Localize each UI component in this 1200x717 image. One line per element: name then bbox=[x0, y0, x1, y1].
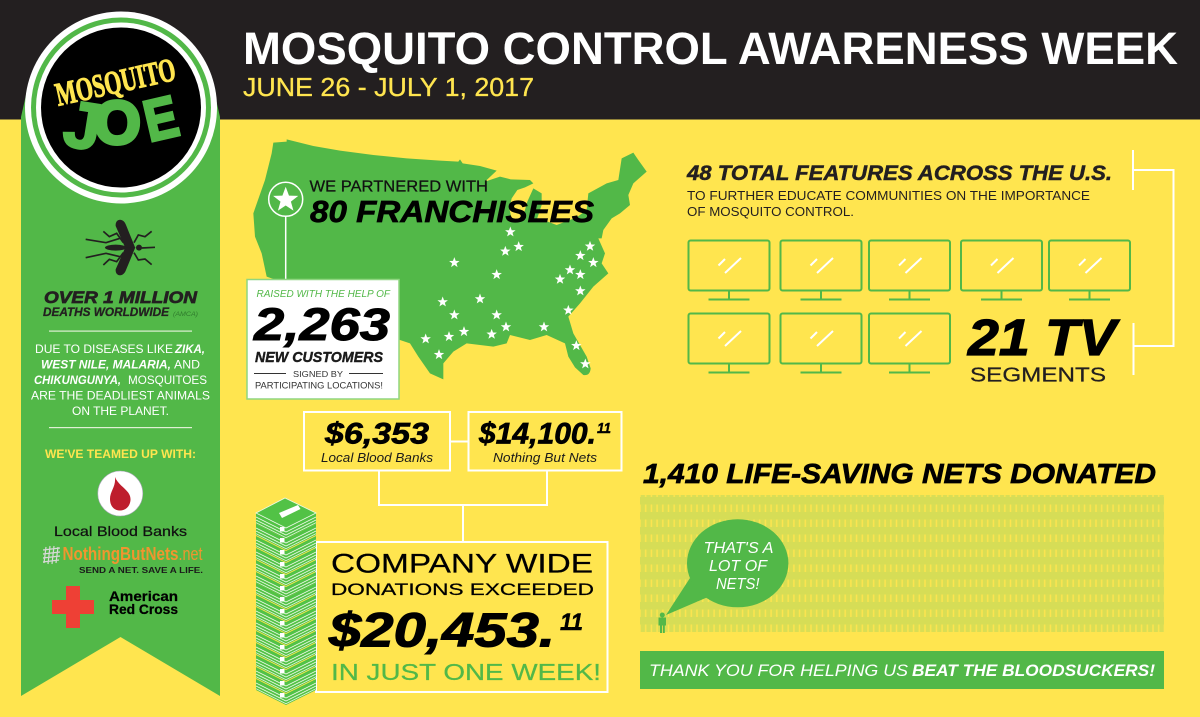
box: local blood banks bbox=[304, 412, 450, 470]
callout: new customers: PARTICIPATING LOCATIONS! bbox=[255, 380, 383, 392]
icon: blood drop bbox=[98, 471, 143, 516]
disease text: CHIKUNGUNYA, bbox=[34, 373, 121, 387]
description: TO FURTHER EDUCATE COMMUNITIES ON THE IMPORTANCE bbox=[687, 189, 1090, 203]
banner: thank you: BEAT THE BLOODSUCKERS! bbox=[912, 661, 1155, 680]
banner: thank you: THANK YOU FOR HELPING US bbox=[649, 661, 909, 680]
callout: new customers bbox=[247, 280, 399, 399]
disease text bbox=[31, 342, 210, 418]
box: company wide total bbox=[316, 542, 608, 692]
logo: american red cross: Red Cross bbox=[109, 601, 178, 617]
label: local blood banks: Local Blood Banks bbox=[54, 523, 187, 539]
disease text: WEST NILE, MALARIA, bbox=[41, 358, 171, 372]
logo badge: E bbox=[138, 84, 184, 154]
box: company wide total: DONATIONS EXCEEDED bbox=[331, 580, 594, 599]
logo badge: J bbox=[59, 86, 107, 165]
title: MOSQUITO CONTROL AWARENESS WEEK bbox=[243, 23, 1178, 74]
box: company wide total: 11 bbox=[560, 609, 583, 636]
callout: new customers: 2,263 bbox=[253, 299, 390, 350]
logo: nothing but nets: SEND A NET. SAVE A LIFE. bbox=[79, 565, 203, 575]
icons: tv grid bbox=[688, 240, 1130, 372]
heading: we partnered with: WE PARTNERED WITH bbox=[310, 178, 488, 196]
speech bubble: LOT OF bbox=[709, 558, 768, 575]
map of the U.S. with stars bbox=[253, 139, 647, 379]
heading: 48 total features: 48 TOTAL FEATURES ACROSS THE U.S. bbox=[686, 162, 1112, 185]
icon: mosquito bbox=[86, 220, 155, 275]
logo badge: O bbox=[94, 90, 141, 156]
stat: 21 tv: 21 TV bbox=[967, 309, 1120, 366]
callout: new customers: SIGNED BY bbox=[293, 369, 343, 379]
speech bubble: THAT'S A bbox=[704, 540, 774, 557]
disease text: ZIKA, bbox=[174, 342, 205, 356]
icon: star marker bbox=[269, 182, 303, 279]
ribbon shape bbox=[21, 60, 220, 696]
logo: american red cross bbox=[52, 586, 178, 628]
panel: franchisee map bbox=[247, 139, 647, 399]
banner: thank you bbox=[640, 651, 1164, 689]
icon: person bbox=[658, 612, 666, 633]
box: nothing but nets: $14,100. bbox=[478, 418, 596, 450]
teamed up heading: WE'VE TEAMED UP WITH: bbox=[45, 449, 196, 461]
panel: donation breakdown bbox=[256, 412, 622, 705]
box: nothing but nets: 11 bbox=[597, 420, 611, 437]
logo badge: MOSQUITO bbox=[52, 52, 179, 114]
stat subtitle: DEATHS WORLDWIDE bbox=[43, 305, 170, 319]
box: local blood banks: Local Blood Banks bbox=[321, 451, 433, 465]
panel: ribbon bbox=[21, 12, 220, 696]
box: company wide total: $20,453. bbox=[328, 604, 555, 658]
description bbox=[687, 189, 1090, 219]
stat: segments: SEGMENTS bbox=[970, 364, 1106, 386]
heading: nets donated: 1,410 LIFE-SAVING NETS DONATED bbox=[643, 458, 1156, 489]
box: local blood banks: $6,353 bbox=[324, 418, 429, 450]
header band bbox=[0, 0, 1200, 120]
connectors bbox=[379, 442, 547, 542]
disease text: ARE THE DEADLIEST ANIMALS bbox=[31, 388, 210, 402]
source note: (AMCA) bbox=[173, 311, 198, 318]
panel: nets donated bbox=[640, 458, 1164, 689]
chart: people pictogram bbox=[640, 495, 1164, 632]
disease text: DUE TO DISEASES LIKE bbox=[35, 342, 173, 356]
box: nothing but nets bbox=[468, 412, 622, 470]
speech bubble: NETS! bbox=[716, 576, 760, 593]
box: nothing but nets: Nothing But Nets bbox=[493, 451, 597, 465]
box: company wide total: COMPANY WIDE bbox=[331, 548, 593, 578]
disease text: AND bbox=[174, 358, 200, 372]
panel: tv segments bbox=[686, 150, 1174, 386]
callout: new customers: NEW CUSTOMERS bbox=[255, 349, 383, 366]
icon: money stack bbox=[256, 498, 316, 705]
bracket bbox=[1133, 150, 1174, 375]
box: company wide total: IN JUST ONE WEEK! bbox=[331, 659, 601, 685]
stat: over 1 million: OVER 1 MILLION bbox=[44, 288, 198, 307]
description: OF MOSQUITO CONTROL. bbox=[687, 205, 854, 219]
disease text: MOSQUITOES bbox=[128, 373, 207, 387]
logo: american red cross: American bbox=[109, 588, 178, 604]
disease text: ON THE PLANET. bbox=[72, 404, 169, 418]
logo badge bbox=[25, 12, 217, 204]
logo: nothing but nets: NothingButNets bbox=[62, 544, 178, 564]
speech bubble bbox=[666, 519, 788, 615]
callout: new customers: RAISED WITH THE HELP OF bbox=[256, 289, 391, 300]
heading: 80 franchisees: 80 FRANCHISEES bbox=[310, 194, 594, 229]
logo: nothing but nets: .net bbox=[178, 544, 202, 564]
date: JUNE 26 - JULY 1, 2017 bbox=[243, 72, 534, 102]
logo: nothing but nets bbox=[43, 544, 203, 575]
